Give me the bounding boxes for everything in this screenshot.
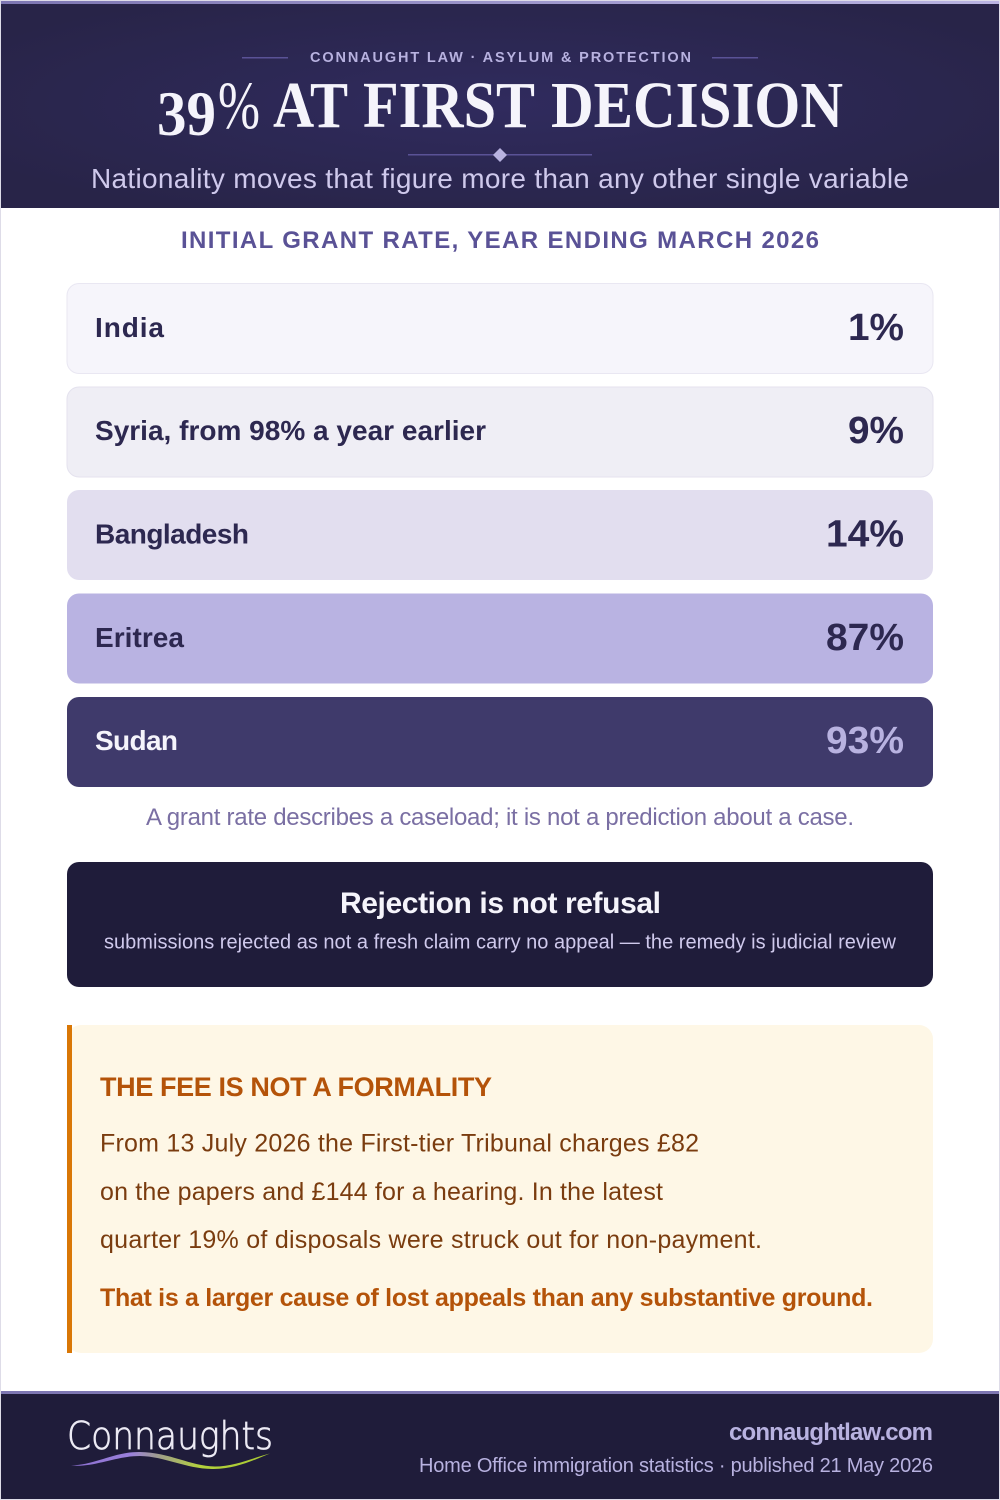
row: India: 1% [848, 307, 904, 349]
row: India: India [95, 312, 164, 343]
panel: rejection [67, 862, 933, 987]
title: DECISION [551, 69, 843, 142]
logo: Connaughts [67, 1414, 273, 1458]
footer url: connaughtlaw.com [729, 1419, 933, 1446]
subtitle: Nationality moves that figure more than any other single variable [91, 163, 909, 194]
callout body: From 13 July 2026 the First-tier Tribunal charges £82 [100, 1130, 699, 1158]
row: Syria: Syria, from 98% a year earlier [95, 415, 486, 446]
title: FIRST [363, 69, 535, 142]
callout body [100, 1130, 762, 1254]
ornament divider [408, 148, 592, 162]
row: India [67, 284, 933, 374]
row: Bangladesh [67, 490, 933, 580]
caption: A grant rate describes a caseload; it is not a prediction about a case. [146, 804, 854, 831]
section heading: INITIAL GRANT RATE, YEAR ENDING MARCH 2026 [181, 227, 819, 254]
callout conclusion: That is a larger cause of lost appeals than any substantive ground. [100, 1284, 873, 1312]
title: 39 [157, 79, 216, 149]
panel: rejection: submissions rejected as not a fresh claim carry no appeal — the remedy is judicial review [104, 932, 897, 954]
row: Syria [67, 387, 933, 477]
footer [0, 1391, 1000, 1500]
header band [0, 0, 1000, 208]
callout body: quarter 19% of disposals were struck out for non-payment. [100, 1226, 762, 1254]
row: Sudan: 93% [826, 720, 904, 762]
row: Sudan: Sudan [95, 725, 178, 756]
row: Sudan [67, 697, 933, 787]
eyebrow: CONNAUGHT LAW · ASYLUM & PROTECTION [310, 50, 691, 66]
source line: Home Office immigration statistics · published 21 May 2026 [419, 1455, 933, 1477]
title: AT [273, 69, 348, 142]
panel: fee callout [67, 1025, 933, 1353]
row: Eritrea [67, 594, 933, 684]
title [157, 67, 843, 149]
row: Eritrea: Eritrea [95, 622, 184, 653]
row: Bangladesh: 14% [826, 514, 904, 556]
title: % [218, 67, 260, 143]
row: Syria: 9% [848, 410, 904, 452]
row: Bangladesh: Bangladesh [95, 518, 249, 550]
row: Eritrea: 87% [826, 617, 904, 659]
callout body: on the papers and £144 for a hearing. In the latest [100, 1178, 663, 1206]
panel: rejection: Rejection is not refusal [340, 887, 661, 920]
callout heading: THE FEE IS NOT A FORMALITY [100, 1072, 492, 1102]
